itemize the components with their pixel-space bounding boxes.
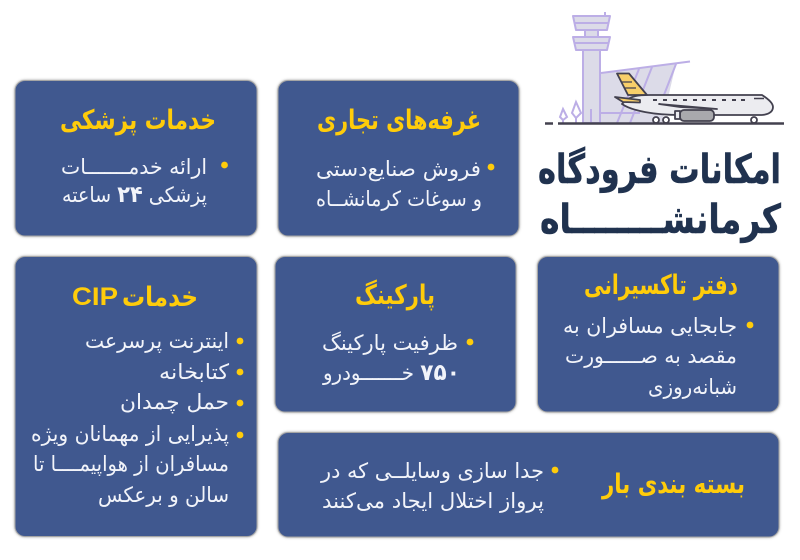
heading: CIP services: خدمات	[122, 282, 198, 313]
title	[538, 146, 782, 243]
panel: commercial booths	[278, 80, 519, 236]
text: CIP list	[31, 329, 229, 507]
text: CIP list: سالن و برعکس	[98, 483, 229, 507]
icon: airplane	[615, 74, 773, 123]
bullet	[747, 322, 753, 328]
text: taxi description: مقصد به صــــــورت	[565, 344, 737, 368]
text: taxi description: شبانه‌روزی	[648, 375, 737, 399]
text: CIP list: کتابخانه	[159, 360, 229, 384]
ground line	[545, 122, 784, 125]
heading: CIP services: CIP	[72, 283, 118, 311]
heading: parking: پارکینگ	[355, 279, 435, 311]
text: CIP list: مسافران از هواپیمــــا تا	[33, 452, 229, 476]
heading: commercial booths: غرفه‌های تجاری	[317, 105, 481, 136]
bullet	[552, 467, 558, 473]
bullet	[221, 162, 228, 168]
bullet	[488, 164, 494, 170]
panel: baggage wrapping	[278, 432, 779, 537]
heading: baggage wrapping: بسته بندی بار	[600, 469, 745, 500]
heading: medical services: خدمات پزشکی	[60, 105, 216, 136]
text: medical description: ارائه خدمـــــــات	[61, 155, 207, 179]
icon: terminal building	[591, 62, 690, 123]
text: baggage description: جدا سازی وسایلــی که در	[320, 459, 544, 483]
text: baggage description: پرواز اختلال ایجاد می‌کنند	[322, 489, 544, 513]
icon: control tower	[573, 12, 610, 123]
heading: taxi office: دفتر تاکسیرانی	[584, 270, 738, 301]
text: taxi description: جابجایی مسافران به	[563, 314, 737, 338]
panel: medical services	[15, 80, 257, 236]
text: medical description: پزشکی ۲۴ ساعته	[62, 182, 207, 208]
text: parking description: ظرفیت پارکینگ	[322, 331, 458, 355]
text: commercial description: و سوغات کرمانشــاه	[316, 187, 482, 211]
text: parking description	[322, 331, 460, 386]
text: commercial description	[316, 157, 482, 211]
text: CIP list: اینترنت پرسرعت	[85, 329, 229, 353]
heading: CIP services	[72, 282, 198, 313]
text: CIP list: حمل چمدان	[120, 390, 229, 414]
panel: CIP services	[15, 256, 257, 536]
text: medical description	[61, 155, 207, 208]
text: parking description: ۷۵۰ خـــــــودرو	[322, 360, 460, 386]
bullet	[467, 339, 473, 345]
icon: small trees	[560, 102, 581, 123]
panel: parking	[275, 256, 516, 412]
text: CIP list: پذیرایی از مهمانان ویژه	[31, 422, 229, 446]
text: commercial description: فروش صنایع‌دستی	[316, 157, 481, 181]
text: taxi description	[563, 314, 737, 399]
panel: taxi office	[538, 256, 779, 412]
bullets	[237, 338, 243, 438]
illustration: airport tower, terminal and airplane	[545, 12, 784, 124]
text: baggage description	[320, 459, 544, 513]
